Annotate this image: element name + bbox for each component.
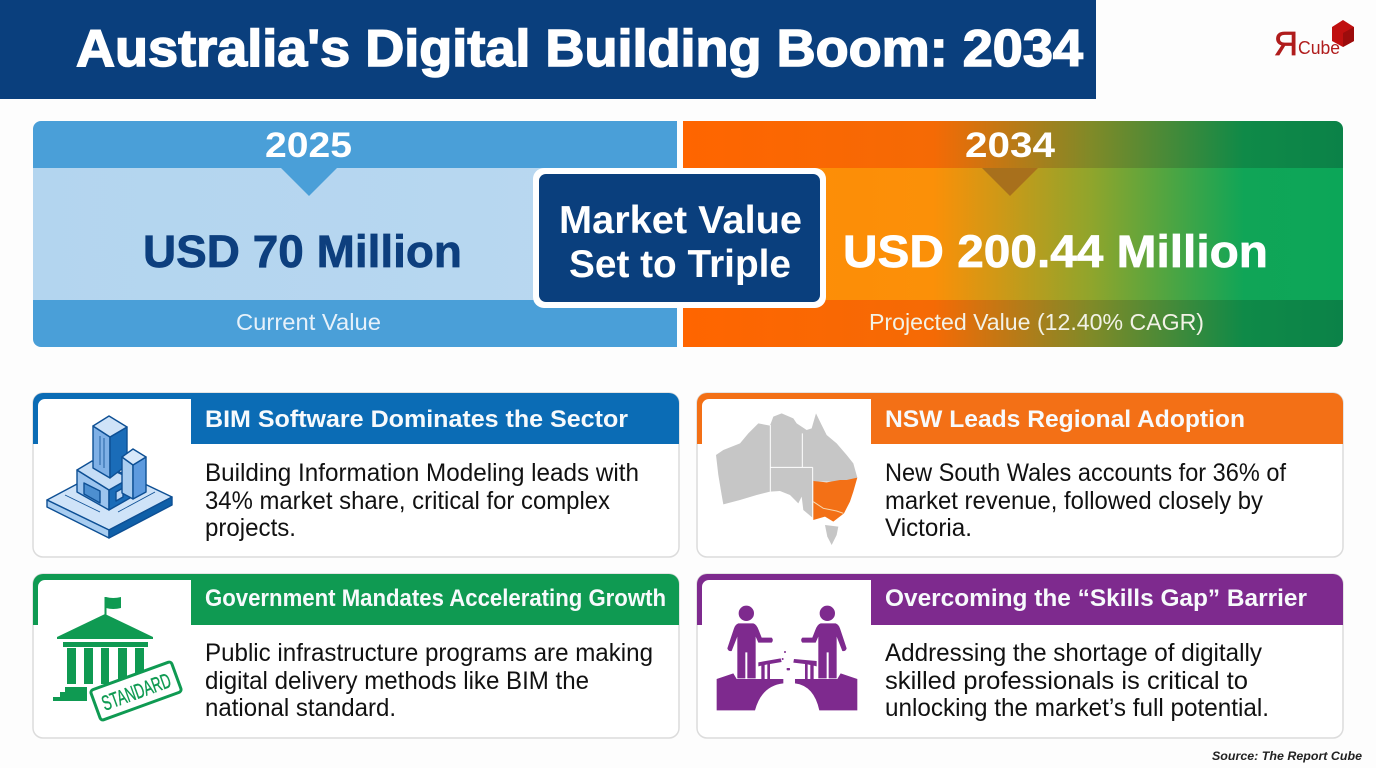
panel: government mandates — [33, 574, 679, 738]
panel: skills gap — [697, 574, 1343, 738]
panel: 2034 value: Projected Value (12.40% CAGR) — [869, 309, 1204, 335]
text: BIM body: 34% market share, critical for complex — [205, 487, 610, 515]
panel: BIM software — [33, 393, 679, 557]
callout: market value set to triple — [533, 168, 826, 308]
text: NSW body: market revenue, followed closely by — [885, 487, 1263, 515]
panel: 2025 value: USD 70 Million — [143, 226, 462, 277]
logo: RCube: Я — [1274, 25, 1298, 62]
text: skills gap body: unlocking the market’s full potential. — [885, 694, 1269, 722]
icon: government building with stamp — [53, 597, 182, 721]
text: BIM body — [205, 459, 639, 542]
text: BIM body: projects. — [205, 514, 296, 542]
icon: government building with stamp: STANDARD — [99, 669, 174, 716]
text: skills gap body — [885, 639, 1269, 722]
callout: market value set to triple: Set to Triple — [569, 243, 791, 286]
heading: BIM: BIM Software Dominates the Sector — [205, 406, 628, 433]
logo: RCube — [1274, 20, 1354, 62]
text: government body: Public infrastructure programs are making — [205, 639, 653, 667]
heading: NSW: NSW Leads Regional Adoption — [885, 406, 1245, 433]
source note: Source: The Report Cube — [1212, 749, 1362, 763]
panel: 2034 value — [683, 121, 1343, 347]
heading: skills gap: Overcoming the “Skills Gap” Barrier — [885, 585, 1307, 612]
panel: 2034 value: USD 200.44 Million — [843, 226, 1268, 277]
text: NSW body: Victoria. — [885, 514, 972, 542]
text: skills gap body: skilled professionals is critical to — [885, 667, 1248, 695]
callout: market value set to triple: Market Value — [559, 199, 802, 242]
text: NSW body — [885, 459, 1286, 542]
text: government body: digital delivery methods like BIM the — [205, 667, 589, 695]
text: government body — [205, 639, 653, 722]
text: government body: national standard. — [205, 694, 396, 722]
icon: Australia map — [716, 413, 857, 545]
panel: 2025 value: 2025 — [265, 126, 352, 165]
heading: government: Government Mandates Accelerating Growth — [205, 585, 666, 612]
title banner — [0, 0, 1096, 99]
panel: NSW regional adoption — [697, 393, 1343, 557]
logo: RCube: Cube — [1298, 38, 1340, 58]
panel: 2025 value: Current Value — [236, 309, 381, 335]
text: NSW body: New South Wales accounts for 36% of — [885, 459, 1286, 487]
title banner: Australia's Digital Building Boom: 2034 — [76, 20, 1083, 78]
panel: 2025 value — [33, 121, 677, 347]
text: BIM body: Building Information Modeling leads with — [205, 459, 639, 487]
icon: isometric building — [47, 416, 172, 538]
panel: 2034 value: 2034 — [965, 126, 1056, 165]
icon: broken bridge with two people — [717, 606, 857, 710]
text: skills gap body: Addressing the shortage of digitally — [885, 639, 1262, 667]
